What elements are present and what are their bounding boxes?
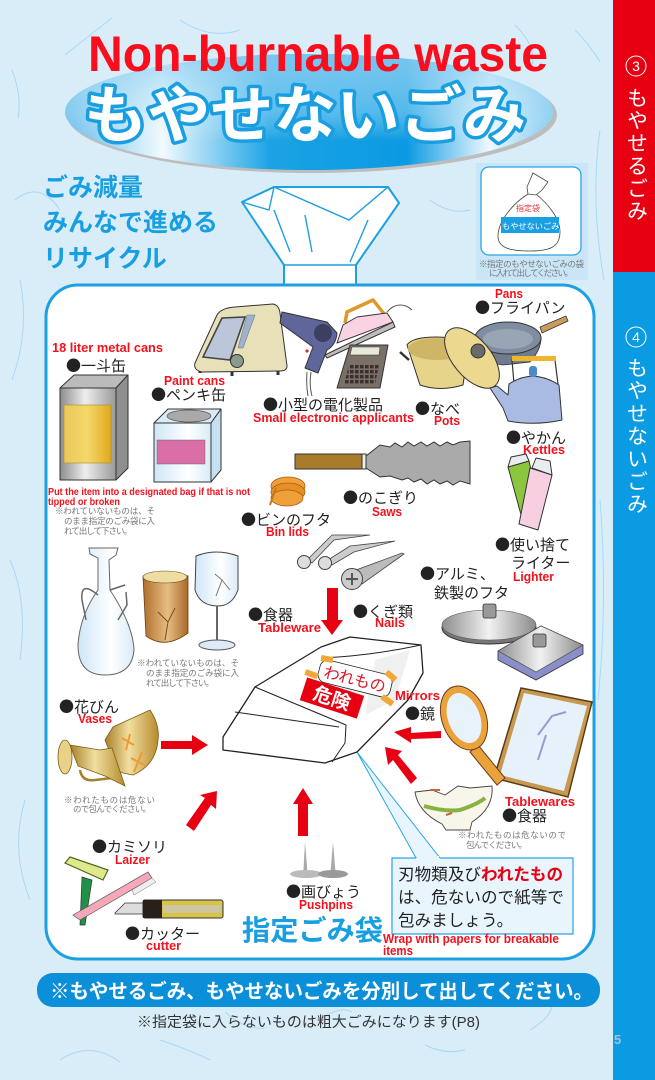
grey note: vases: ※われたものは危ない <box>64 795 155 805</box>
arrow: from pushpins <box>293 788 313 836</box>
pushpins <box>290 842 348 878</box>
label: pans: Pans <box>495 286 523 301</box>
grey note: cans: のまま指定のごみ袋に入 <box>64 516 155 526</box>
main panel <box>46 285 594 959</box>
metal can <box>60 375 128 480</box>
large bag neck illustration <box>242 187 399 285</box>
section number 4 <box>626 327 646 347</box>
label: mirrors: ●鏡 <box>405 703 435 724</box>
section number 4: 4 <box>632 329 640 345</box>
label: saws: ●のこぎり <box>343 487 418 508</box>
arrow: from bowl <box>385 747 417 784</box>
tag: danger <box>300 677 364 719</box>
grey note: bowl <box>458 830 566 850</box>
grey note: bowl: ※われたものは危ないので <box>458 830 566 840</box>
label: lighter: ●使い捨て <box>495 534 570 555</box>
razors <box>65 857 156 925</box>
vase <box>78 548 134 675</box>
red note: tipped or broken <box>48 496 120 508</box>
label: tableware: ●食器 <box>248 604 293 625</box>
glass <box>195 552 238 606</box>
label: saws: Saws <box>372 504 402 519</box>
sidebar label: もやせるごみ <box>624 87 648 223</box>
label: nails: Nails <box>375 615 405 630</box>
label: mirrors <box>395 688 440 724</box>
label: tableware <box>248 604 321 635</box>
slogan: ごみ減量 <box>43 173 143 202</box>
calculator <box>337 345 388 388</box>
label: paint cans <box>151 373 226 405</box>
red note: wrap: Wrap with papers for breakable <box>383 931 559 946</box>
label: paint cans: ●ペンキ缶 <box>151 384 226 405</box>
grey note: glass <box>137 658 239 688</box>
kettle <box>490 356 562 423</box>
red note <box>48 486 250 508</box>
arrow: down <box>321 588 343 635</box>
vase, cup and glass <box>78 548 238 675</box>
callout text: 刃物類及びわれたもの <box>398 865 563 884</box>
label: vases: Vases <box>78 711 112 726</box>
metal lids <box>442 604 583 680</box>
section number 3: 3 <box>632 58 640 74</box>
cup <box>143 573 188 642</box>
sidebar tab: burnable waste <box>613 0 655 272</box>
designated bag icon panel <box>476 163 588 280</box>
label: bin lids: Bin lids <box>266 524 309 539</box>
saw <box>295 441 470 485</box>
slogan: みんなで進める <box>43 209 218 237</box>
heading: designated bag: 指定ごみ袋 <box>242 914 383 946</box>
slogan <box>43 173 218 273</box>
tag: breakable <box>304 655 398 706</box>
arrow: from vases <box>161 735 208 755</box>
grey note: glass: のまま指定のごみ袋に入 <box>146 668 239 678</box>
sidebar label: もやせないごみ <box>624 357 648 516</box>
callout box: 包みましょう。 <box>398 911 513 930</box>
label: pans <box>475 286 565 318</box>
red note: wrap <box>383 931 559 958</box>
label: metal cans: ●一斗缶 <box>66 355 126 376</box>
label: pushpins: Pushpins <box>299 897 353 912</box>
label: pots: Pots <box>434 413 460 428</box>
title banner <box>65 26 557 173</box>
label: pushpins <box>286 881 361 912</box>
small electronic appliances <box>195 300 412 396</box>
red note: wrap: items <box>383 943 413 958</box>
bag note: ※指定のもやせないごみの袋 <box>479 259 584 269</box>
grey note: glass: ※われていないものは、そ <box>137 658 239 668</box>
cutter <box>115 900 223 918</box>
label: nails: ●くぎ類 <box>353 601 413 622</box>
grey note: cans <box>55 506 155 536</box>
label: bowl tableware: Tablewares <box>505 794 575 809</box>
label: bowl tableware: ●食器 <box>502 805 547 826</box>
label: metal cans <box>52 340 163 376</box>
hair dryer <box>280 312 337 396</box>
grey note: cans: ※われていないものは、そ <box>55 506 155 516</box>
tag: danger: 危険 <box>310 682 353 715</box>
grey note: cans: れて出して下さい。 <box>64 526 132 536</box>
bag note: に入れて出してください。 <box>489 268 573 278</box>
label: tableware: Tableware <box>258 620 321 635</box>
label: pushpins: ●画びょう <box>286 881 361 902</box>
footnote: ※指定袋に入らないものは粗大ごみになります(P8) <box>137 1014 480 1031</box>
vases item <box>58 710 158 786</box>
bag note <box>479 259 584 278</box>
bottom banner: ※もやせるごみ、もやせないごみを分別して出してください。 <box>50 979 593 1003</box>
label: mirrors: Mirrors <box>395 688 440 703</box>
arrow: from razors <box>186 791 217 831</box>
label: metal lids: ●アルミ、 <box>420 563 495 584</box>
danger bag <box>223 637 423 763</box>
nails and screw <box>298 535 404 590</box>
mirrors <box>432 679 592 797</box>
label: small electronics: Small electronic applicants <box>253 410 414 425</box>
label: cutter: ●カッター <box>125 923 200 944</box>
icon: tied bag <box>498 173 560 251</box>
label: small electronics <box>253 394 414 425</box>
framed mirror <box>494 688 592 797</box>
label: razor: ●カミソリ <box>92 836 167 857</box>
pan <box>475 316 568 365</box>
lighters <box>508 454 552 530</box>
label: paint cans: Paint cans <box>164 373 225 388</box>
callout box <box>392 856 573 934</box>
label: razor: Laizer <box>115 852 150 867</box>
callout box: は、危ないので紙等で <box>398 888 564 907</box>
label: kettles: Kettles <box>523 442 565 457</box>
grey note: bowl: 包んでください。 <box>466 840 527 850</box>
hand mirror <box>470 745 505 785</box>
grey note: vases: ので包んでください。 <box>73 804 151 814</box>
label: metal lids: 鉄製のフタ <box>434 582 509 603</box>
grey note: vases <box>64 795 155 814</box>
sidebar tab: non-burnable waste <box>613 272 655 1080</box>
tag: breakable: われもの <box>322 664 388 696</box>
page number: 5 <box>614 1032 621 1047</box>
label: vases: ●花びん <box>59 696 119 717</box>
label: pans: ●フライパン <box>475 297 565 318</box>
callout pointer <box>357 752 440 858</box>
label: razor <box>92 836 167 867</box>
bin lids <box>270 477 305 506</box>
label: saws <box>343 487 418 519</box>
paint can <box>154 409 221 482</box>
bottom banner <box>37 973 600 1007</box>
slogan: リサイクル <box>43 245 167 273</box>
designated bag icon panel: もやせないごみ <box>502 221 559 231</box>
toaster <box>195 304 287 376</box>
grey note: glass: れて出して下さい。 <box>146 678 214 688</box>
bag label: 指定袋 <box>516 203 540 213</box>
label: lighter <box>495 534 570 584</box>
bowl <box>415 786 492 830</box>
label: bowl tableware <box>502 794 575 826</box>
label: small electronics: ●小型の電化製品 <box>263 394 383 415</box>
label: lighter: Lighter <box>513 569 554 584</box>
label: metal lids <box>420 563 509 603</box>
label: kettles: ●やかん <box>506 427 566 448</box>
arrow: from mirrors <box>394 727 441 743</box>
label: cutter: cutter <box>146 938 181 953</box>
section number 3 <box>626 56 646 76</box>
red note: Put the item into a designated bag if that is not <box>48 486 250 498</box>
English title: Non-burnable waste <box>88 26 548 82</box>
label: bin lids: ●ビンのフタ <box>241 509 331 530</box>
iron <box>325 300 412 358</box>
pot with lid <box>400 318 510 398</box>
Japanese title: もやせないごみ <box>84 82 526 151</box>
label: lighter: ライター <box>511 552 570 573</box>
label: metal cans: 18 liter metal cans <box>52 340 163 355</box>
label: pots: ●なべ <box>415 398 460 419</box>
